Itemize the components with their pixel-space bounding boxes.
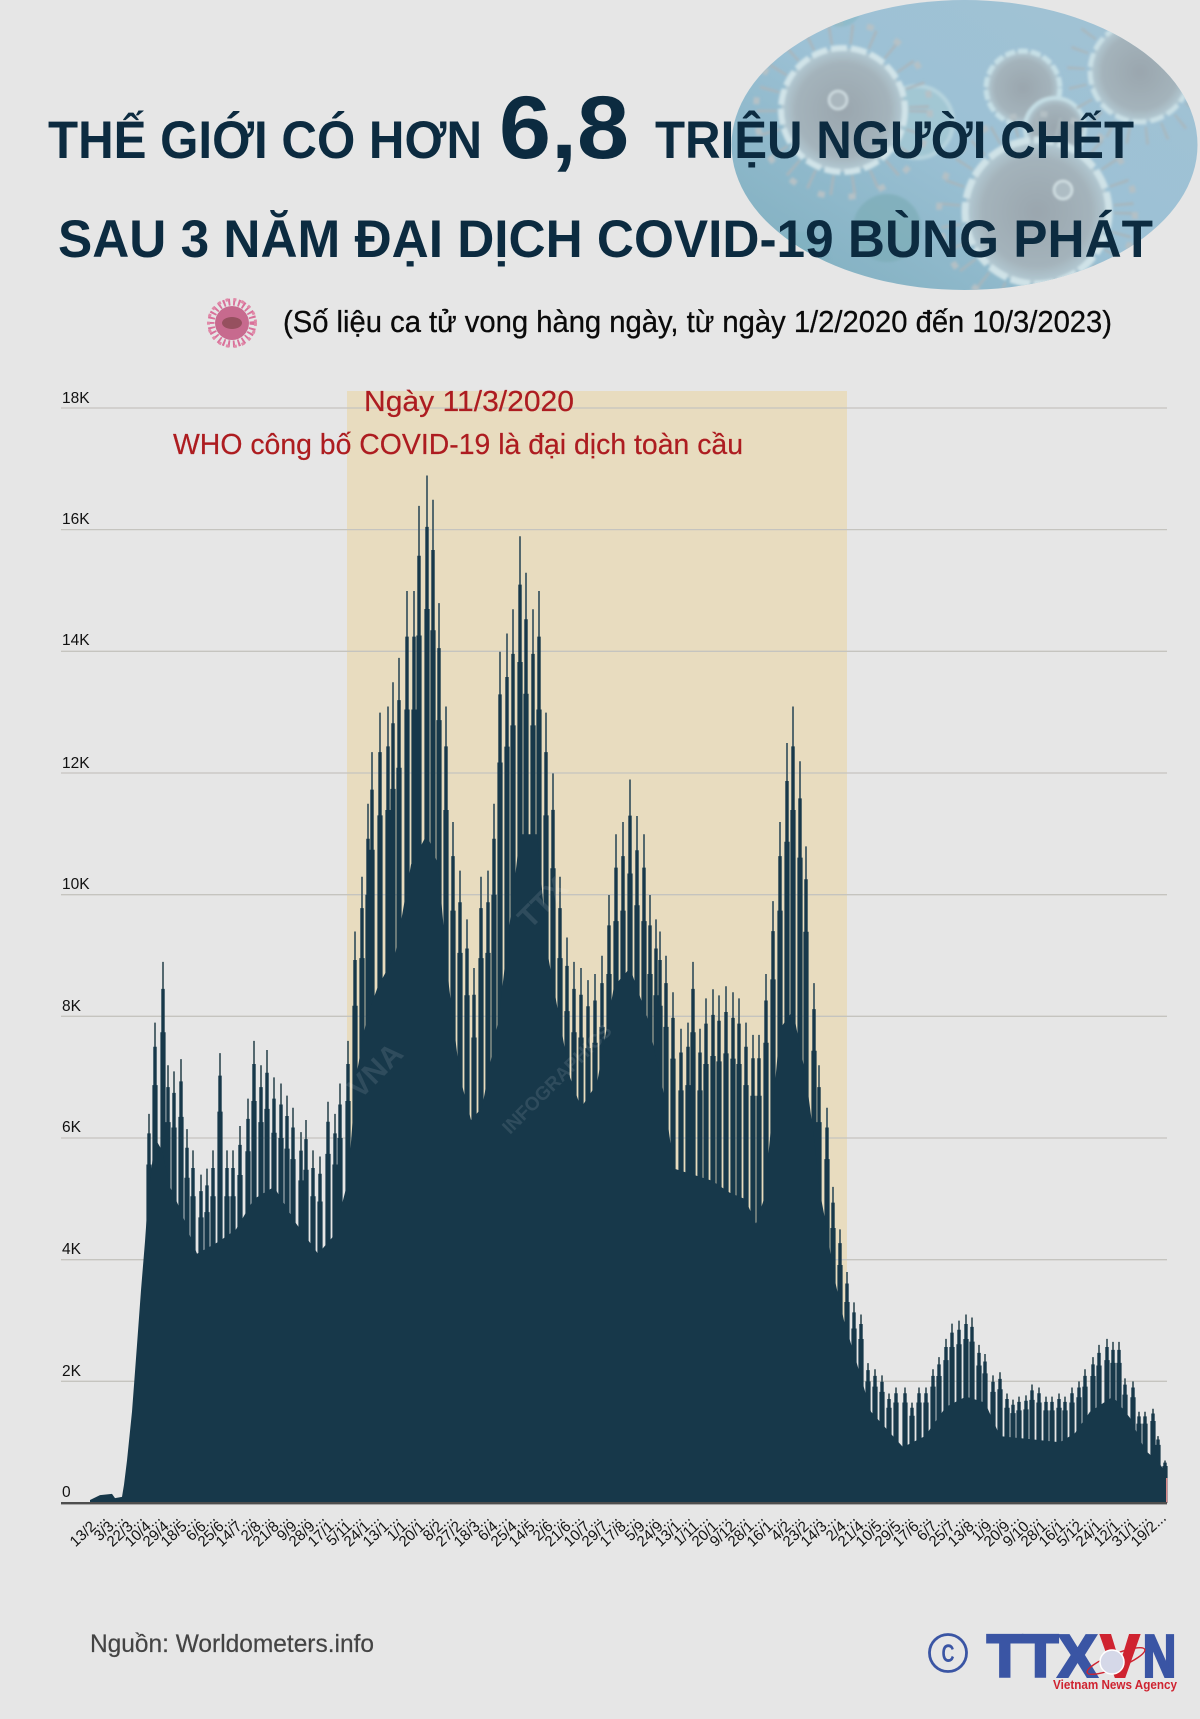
y axis: gridlines and labels: 14K — [62, 632, 90, 649]
x axis date labels: 22/3... — [104, 1509, 146, 1550]
x axis date labels: 13/1... — [652, 1509, 694, 1550]
x axis date labels: 8/2... — [420, 1509, 456, 1545]
y axis: gridlines and labels: 18K — [62, 390, 90, 407]
y axis: gridlines and labels: 4K — [62, 1241, 82, 1258]
y axis: gridlines and labels: 2K — [62, 1363, 82, 1380]
wordmark: V — [1101, 1624, 1139, 1690]
x axis date labels: 21/4... — [835, 1509, 877, 1550]
x axis date labels: 9/9... — [274, 1509, 310, 1545]
wordmark — [987, 1624, 1176, 1690]
x axis date labels: 5/11... — [323, 1509, 365, 1550]
x axis date labels: 24/1... — [1073, 1509, 1115, 1550]
bars: weekly peak tips — [149, 475, 1165, 1503]
y axis: gridlines and labels: 16K — [62, 511, 90, 528]
x axis date labels: 28/1... — [1018, 1509, 1060, 1550]
subtitle: (Số liệu ca tử vong hàng ngày, từ ngày 1/2/2020 đến 10/3/2023) — [283, 304, 1112, 339]
x axis date labels: 17/1... — [305, 1509, 347, 1550]
x axis date labels: 5/12... — [1054, 1509, 1096, 1550]
watermark: TTX — [512, 872, 575, 935]
x axis date labels: 29/4... — [140, 1509, 182, 1550]
y axis: gridlines and labels: 12K — [62, 755, 90, 772]
x axis date labels: 9/10... — [1000, 1509, 1042, 1550]
icon: copyright: C — [942, 1640, 954, 1668]
x axis date labels: 18/3... — [451, 1509, 493, 1550]
bars: main weekly bars — [149, 609, 1165, 1503]
x axis date labels: 4/2... — [768, 1509, 804, 1545]
bar chart: daily deaths — [90, 475, 1166, 1503]
x axis date labels: 20/1... — [689, 1509, 731, 1550]
callout: WHO pandemic declaration: Ngày 11/3/2020 — [364, 386, 574, 418]
end-of-series marker — [1166, 1478, 1167, 1503]
bars: upper weekly bars — [149, 527, 1165, 1503]
x axis date labels — [67, 1509, 1170, 1550]
x axis date labels: 1/9... — [969, 1509, 1005, 1545]
x axis date labels: 16/1... — [744, 1509, 786, 1550]
x axis date labels: 1/1... — [384, 1509, 420, 1545]
x axis date labels: 14/3... — [798, 1509, 840, 1550]
x axis date labels: 6/6... — [183, 1509, 219, 1545]
x axis date labels: 2/8... — [238, 1509, 274, 1545]
x axis date labels: 24/1... — [341, 1509, 383, 1550]
callout: WHO pandemic declaration — [173, 386, 743, 461]
y axis: gridlines and labels: 10K — [62, 876, 90, 893]
title: TRIỆU NGƯỜI CHẾT — [655, 109, 1134, 170]
x axis date labels: 31/1... — [1109, 1509, 1151, 1550]
x axis date labels: 13/2... — [67, 1509, 109, 1550]
x axis date labels: 28/9... — [286, 1509, 328, 1550]
x axis date labels: 18/5... — [158, 1509, 200, 1550]
x axis date labels: 21/6... — [542, 1509, 584, 1550]
x axis date labels: 16/1... — [1036, 1509, 1078, 1550]
x axis date labels: 29/5... — [872, 1509, 914, 1550]
x axis date labels: 9/12... — [707, 1509, 749, 1550]
x axis date labels: 25/7... — [926, 1509, 968, 1550]
x axis date labels: 2/4... — [823, 1509, 859, 1545]
y axis: gridlines and labels: 8K — [62, 998, 82, 1015]
icon: globe with orbit — [1085, 1643, 1147, 1679]
agency name: Vietnam News Agency — [1053, 1678, 1177, 1692]
x axis date labels: 28/1... — [725, 1509, 767, 1550]
x axis date labels: 10/7... — [561, 1509, 603, 1550]
x axis date labels: 25/6... — [195, 1509, 237, 1550]
wordmark: N — [1143, 1624, 1176, 1690]
source: Nguồn: Worldometers.info — [90, 1630, 374, 1658]
y axis: gridlines and labels — [61, 390, 1167, 1501]
header photo: coronavirus ellipse — [732, 0, 1200, 310]
x axis date labels: 21/8... — [250, 1509, 292, 1550]
x axis date labels: 25/4... — [488, 1509, 530, 1550]
x axis date labels: 2/6... — [530, 1509, 566, 1545]
area: weekly lows — [90, 834, 1166, 1503]
x axis date labels: 3/3... — [91, 1509, 127, 1545]
x axis date labels: 6/7... — [914, 1509, 950, 1545]
x axis date labels: 14/7... — [213, 1509, 255, 1550]
logo: TTXVN — [930, 1624, 1177, 1692]
title: 6,8 — [499, 77, 629, 177]
x axis date labels: 13/8... — [945, 1509, 987, 1550]
x axis date labels: 13/1... — [360, 1509, 402, 1550]
x axis date labels: 29/7... — [579, 1509, 621, 1550]
title: THẾ GIỚI CÓ HƠN — [48, 110, 482, 170]
wordmark: TTX — [987, 1624, 1097, 1690]
highlight band: pandemic declared — [347, 391, 847, 1503]
watermark: INFOGRAPHICS — [499, 1021, 617, 1139]
title — [48, 77, 1153, 269]
baseline — [61, 1502, 1167, 1504]
y axis: gridlines and labels: 0 — [62, 1484, 71, 1501]
title: SAU 3 NĂM ĐẠI DỊCH COVID-19 BÙNG PHÁT — [58, 209, 1153, 269]
x axis date labels: 17/6... — [890, 1509, 932, 1550]
x axis date labels: 12/1... — [1091, 1509, 1133, 1550]
x axis date labels: 14/5... — [506, 1509, 548, 1550]
x axis date labels: 23/2... — [780, 1509, 822, 1550]
x axis date labels: 17/8... — [597, 1509, 639, 1550]
x axis date labels: 6/4... — [475, 1509, 511, 1545]
y axis: gridlines and labels: 6K — [62, 1119, 82, 1136]
x axis date labels: 20/9... — [981, 1509, 1023, 1550]
x axis date labels: 20/1... — [396, 1509, 438, 1550]
watermark: VNA — [342, 1037, 410, 1105]
x axis date labels: 5/9... — [622, 1509, 658, 1545]
watermark — [342, 872, 617, 1139]
callout: WHO pandemic declaration: WHO công bố COVID-19 là đại dịch toàn cầu — [173, 429, 743, 461]
x axis date labels: 10/5... — [853, 1509, 895, 1550]
x axis date labels: 1/11... — [670, 1509, 712, 1550]
icon: pink virus — [208, 300, 256, 346]
icon: copyright — [930, 1634, 966, 1672]
x axis date labels: 10/4... — [122, 1509, 164, 1550]
x axis date labels: 27/2... — [433, 1509, 475, 1550]
x axis date labels: 24/9... — [634, 1509, 676, 1550]
x axis date labels: 19/2... — [1128, 1509, 1170, 1550]
